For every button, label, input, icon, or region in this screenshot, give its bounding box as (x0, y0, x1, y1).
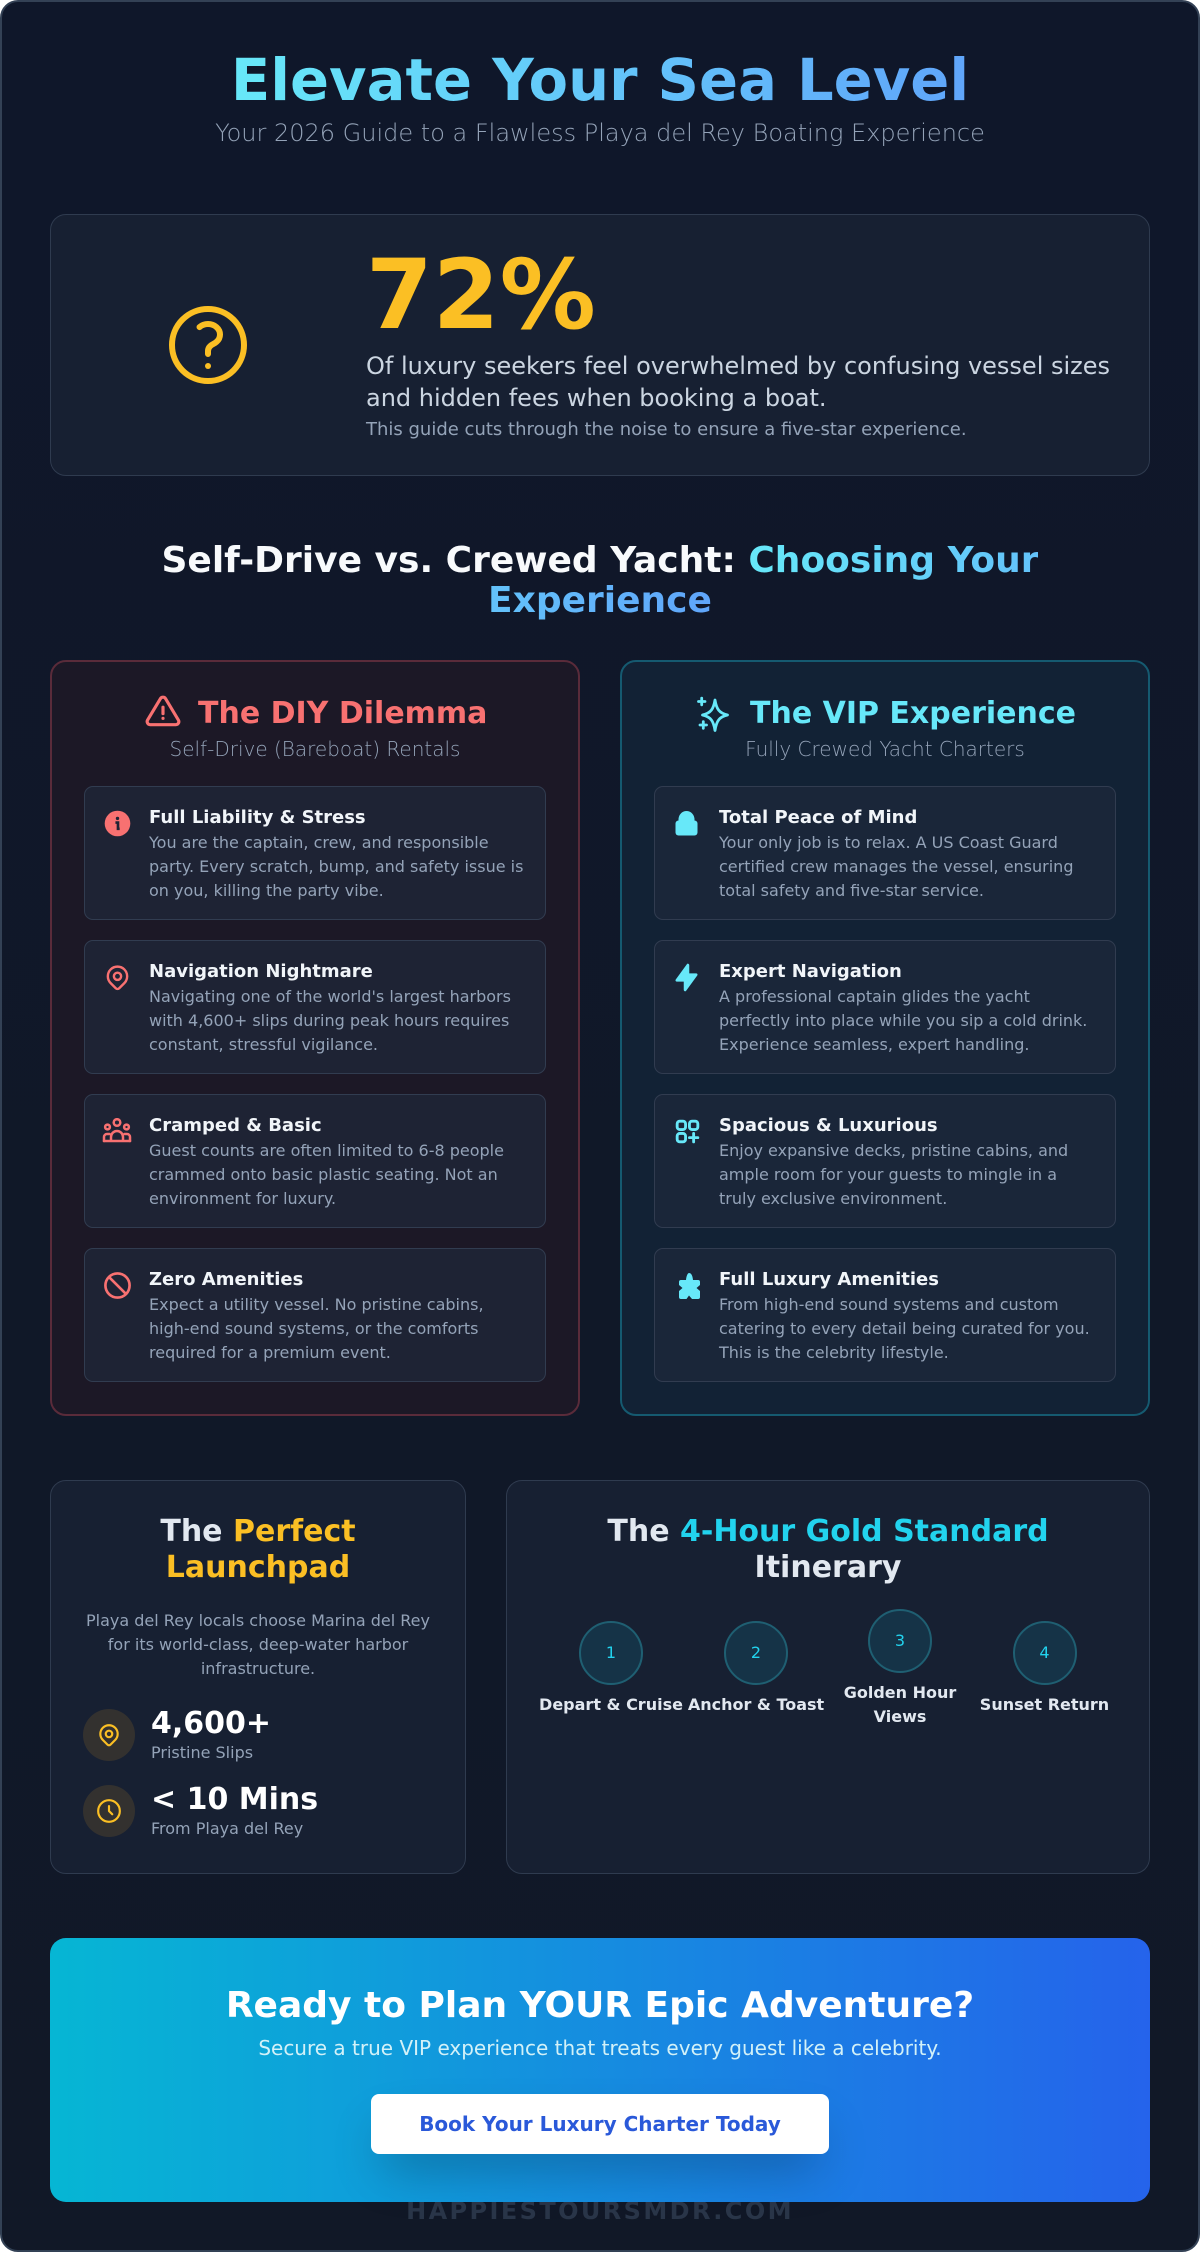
card text: required for a premium event. (149, 1342, 391, 1362)
card text: ample room for your guests to mingle in a (719, 1164, 1057, 1184)
heading: itinerary: The 4-Hour Gold Standard (607, 1514, 1049, 1549)
CTA heading: Ready to Plan YOUR Epic Adventure? (226, 1985, 974, 2026)
card text: You are the captain, crew, and responsible (149, 832, 489, 852)
card text (718, 1294, 1090, 1362)
heading: the DIY dilemma: The DIY Dilemma (198, 696, 487, 731)
card text (719, 1140, 1068, 1208)
section heading (162, 540, 1038, 621)
section heading: Experience (488, 580, 712, 621)
step number (579, 1621, 643, 1685)
card: expert navigation (654, 940, 1116, 1074)
icon: ban (104, 1272, 131, 1299)
card text: high-end sound systems, or the comforts (149, 1318, 478, 1338)
card: full liability (84, 786, 546, 920)
icon: puzzle piece (679, 1273, 700, 1299)
step number (724, 1621, 788, 1685)
launchpad description: for its world-class, deep-water harbor (108, 1635, 408, 1654)
card text: This is the celebrity lifestyle. (719, 1342, 949, 1362)
card text: total safety and five-star service. (719, 880, 984, 900)
icon: lock (676, 811, 698, 836)
launchpad description (86, 1611, 430, 1678)
heading: itinerary (607, 1514, 1049, 1585)
card title: Cramped & Basic (149, 1114, 322, 1136)
call to action banner (50, 1938, 1150, 2202)
launchpad description: infrastructure. (201, 1659, 315, 1678)
step number: 1 (606, 1643, 616, 1662)
card text: Your only job is to relax. A US Coast Guard (719, 832, 1058, 852)
step label (844, 1682, 956, 1726)
card text: with 4,600+ slips during peak hours requires (149, 1010, 509, 1030)
card text: environment for luxury. (149, 1188, 336, 1208)
card: cramped and basic (84, 1094, 546, 1228)
stat label: Pristine Slips (151, 1743, 253, 1762)
card text (149, 832, 523, 900)
launchpad description: Playa del Rey locals choose Marina del Rey (86, 1611, 430, 1630)
icon: lightning bolt (676, 964, 698, 992)
panel: 72 percent statistic (50, 214, 1150, 476)
card text: certified crew manages the vessel, ensuring (719, 856, 1073, 876)
stat: slips (83, 1706, 271, 1762)
step 1 (539, 1621, 683, 1714)
step label: Sunset Return (980, 1694, 1109, 1714)
panel: the DIY dilemma (50, 660, 580, 1416)
heading: the VIP experience: The VIP Experience (750, 696, 1076, 731)
panel: the perfect launchpad (50, 1480, 466, 1874)
card text: perfectly into place while you sip a cold drink. (719, 1010, 1087, 1030)
card text: A professional captain glides the yacht (719, 986, 1030, 1006)
card: spacious and luxurious (654, 1094, 1116, 1228)
CTA button: Book Your Luxury Charter Today (419, 2112, 781, 2136)
card: zero amenities (84, 1248, 546, 1382)
card text: Navigating one of the world's largest harbors (149, 986, 511, 1006)
stat label: From Playa del Rey (151, 1819, 303, 1838)
CTA subheading: Secure a true VIP experience that treats every guest like a celebrity. (258, 2036, 942, 2060)
stat value: 4,600+ (151, 1706, 271, 1741)
card text: Guest counts are often limited to 6-8 people (149, 1140, 504, 1160)
card text: truly exclusive environment. (719, 1188, 947, 1208)
card title: Total Peace of Mind (719, 806, 917, 828)
heading: the perfect launchpad (160, 1514, 356, 1585)
subheading: crewed: Fully Crewed Yacht Charters (745, 737, 1025, 761)
step 3 (844, 1609, 956, 1726)
icon: warning triangle (146, 696, 180, 726)
card text: constant, stressful vigilance. (149, 1034, 378, 1054)
heading: itinerary: Itinerary (755, 1550, 901, 1585)
big number 72%: 72% (366, 239, 596, 351)
card title: Expert Navigation (719, 960, 902, 982)
stat: distance (83, 1782, 318, 1838)
card text (719, 832, 1073, 900)
heading: the perfect launchpad: Launchpad (166, 1550, 350, 1585)
card text: Enjoy expansive decks, pristine cabins, and (719, 1140, 1068, 1160)
icon: info (104, 810, 130, 836)
card text (719, 986, 1087, 1054)
step 2 (688, 1621, 824, 1714)
card title: Spacious & Luxurious (719, 1114, 938, 1136)
icon: clock badge (83, 1785, 135, 1837)
card title: Full Luxury Amenities (719, 1268, 939, 1290)
card title: Zero Amenities (149, 1268, 303, 1290)
card text: party. Every scratch, bump, and safety issue is (149, 856, 523, 876)
step number: 4 (1039, 1643, 1050, 1662)
icon: group of people (102, 1118, 132, 1142)
card title: Navigation Nightmare (149, 960, 373, 982)
icon: category plus (676, 1120, 700, 1144)
step label: Depart & Cruise (539, 1694, 683, 1714)
card text: From high-end sound systems and custom (719, 1294, 1059, 1314)
step label: Anchor & Toast (688, 1694, 824, 1714)
footer watermark: HAPPIESTOURSMDR.COM (406, 2197, 794, 2225)
step 4 (980, 1621, 1109, 1714)
card text: Expect a utility vessel. No pristine cabins, (149, 1294, 484, 1314)
card title: Full Liability & Stress (149, 806, 366, 828)
stat value: < 10 Mins (151, 1782, 318, 1817)
icon: map pin (106, 965, 128, 990)
card: full luxury amenities (654, 1248, 1116, 1382)
step label: Views (874, 1706, 926, 1726)
card: total peace of mind (654, 786, 1116, 920)
step number: 3 (895, 1631, 905, 1650)
section heading: Self-Drive vs. Crewed Yacht: Choosing Your (162, 540, 1038, 581)
card text (149, 1140, 504, 1208)
card text: crammed onto basic plastic seating. Not an (149, 1164, 498, 1184)
icon: question mark circle (169, 306, 247, 384)
card text: Experience seamless, expert handling. (719, 1034, 1030, 1054)
CTA button (371, 2094, 829, 2154)
panel: itinerary (506, 1480, 1150, 1874)
statistic description: and hidden fees when booking a boat. (366, 384, 827, 412)
card text: on you, killing the party vibe. (149, 880, 384, 900)
icon: sparkles (697, 696, 729, 732)
step number (1012, 1621, 1076, 1685)
step label: Golden Hour (844, 1682, 956, 1702)
statistic note: This guide cuts through the noise to ensure a five-star experience. (366, 419, 967, 440)
subheading: self-drive: Self-Drive (Bareboat) Rentals (170, 737, 460, 761)
step number: 2 (751, 1643, 761, 1662)
title: Elevate Your Sea Level (231, 47, 969, 114)
panel: the VIP experience (620, 660, 1150, 1416)
statistic description: Of luxury seekers feel overwhelmed by confusing vessel sizes (366, 352, 1110, 380)
card: navigation nightmare (84, 940, 546, 1074)
card text (149, 1294, 484, 1362)
step number (868, 1609, 932, 1673)
card text (149, 986, 511, 1054)
subtitle: Your 2026 Guide to a Flawless Playa del Rey Boating Experience (215, 119, 985, 147)
icon: map pin badge (83, 1709, 135, 1761)
heading: the perfect launchpad: The Perfect (160, 1514, 356, 1549)
card text: catering to every detail being curated for you. (719, 1318, 1090, 1338)
statistic description (366, 352, 1110, 412)
